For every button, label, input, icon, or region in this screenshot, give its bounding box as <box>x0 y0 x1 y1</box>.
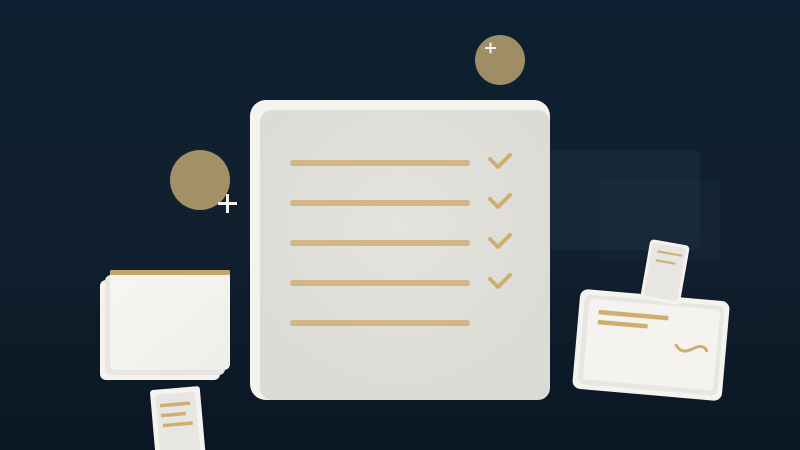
gold circle left <box>170 150 230 210</box>
stacked paper sheets <box>100 270 230 380</box>
card line 1 <box>598 310 669 320</box>
document line 1 <box>160 401 190 407</box>
card inner panel <box>260 110 550 400</box>
small tag on card <box>640 239 690 305</box>
check mark 3 <box>490 235 510 247</box>
check mark 4 <box>490 275 510 287</box>
card line 2 <box>598 320 648 329</box>
tag line 1 <box>657 250 682 257</box>
gold top strip <box>110 270 230 275</box>
check mark 1 <box>490 155 510 167</box>
plus icon left <box>218 194 237 213</box>
small document bottom left <box>150 386 207 450</box>
checklist line 2 <box>290 200 470 206</box>
signature squiggle <box>676 344 707 353</box>
document line 2 <box>161 412 186 417</box>
document line 3 <box>163 421 193 427</box>
checklist line 3 <box>290 240 470 246</box>
checklist line 5 <box>290 320 470 326</box>
main checklist card <box>250 100 550 400</box>
checklist line 4 <box>290 280 470 286</box>
tilted card right <box>572 289 730 401</box>
check mark 2 <box>490 195 510 207</box>
faint background panels <box>500 150 720 260</box>
gold circle top <box>475 35 525 85</box>
plus icon top <box>485 42 496 54</box>
tag line 2 <box>656 259 676 265</box>
checklist line 1 <box>290 160 470 166</box>
